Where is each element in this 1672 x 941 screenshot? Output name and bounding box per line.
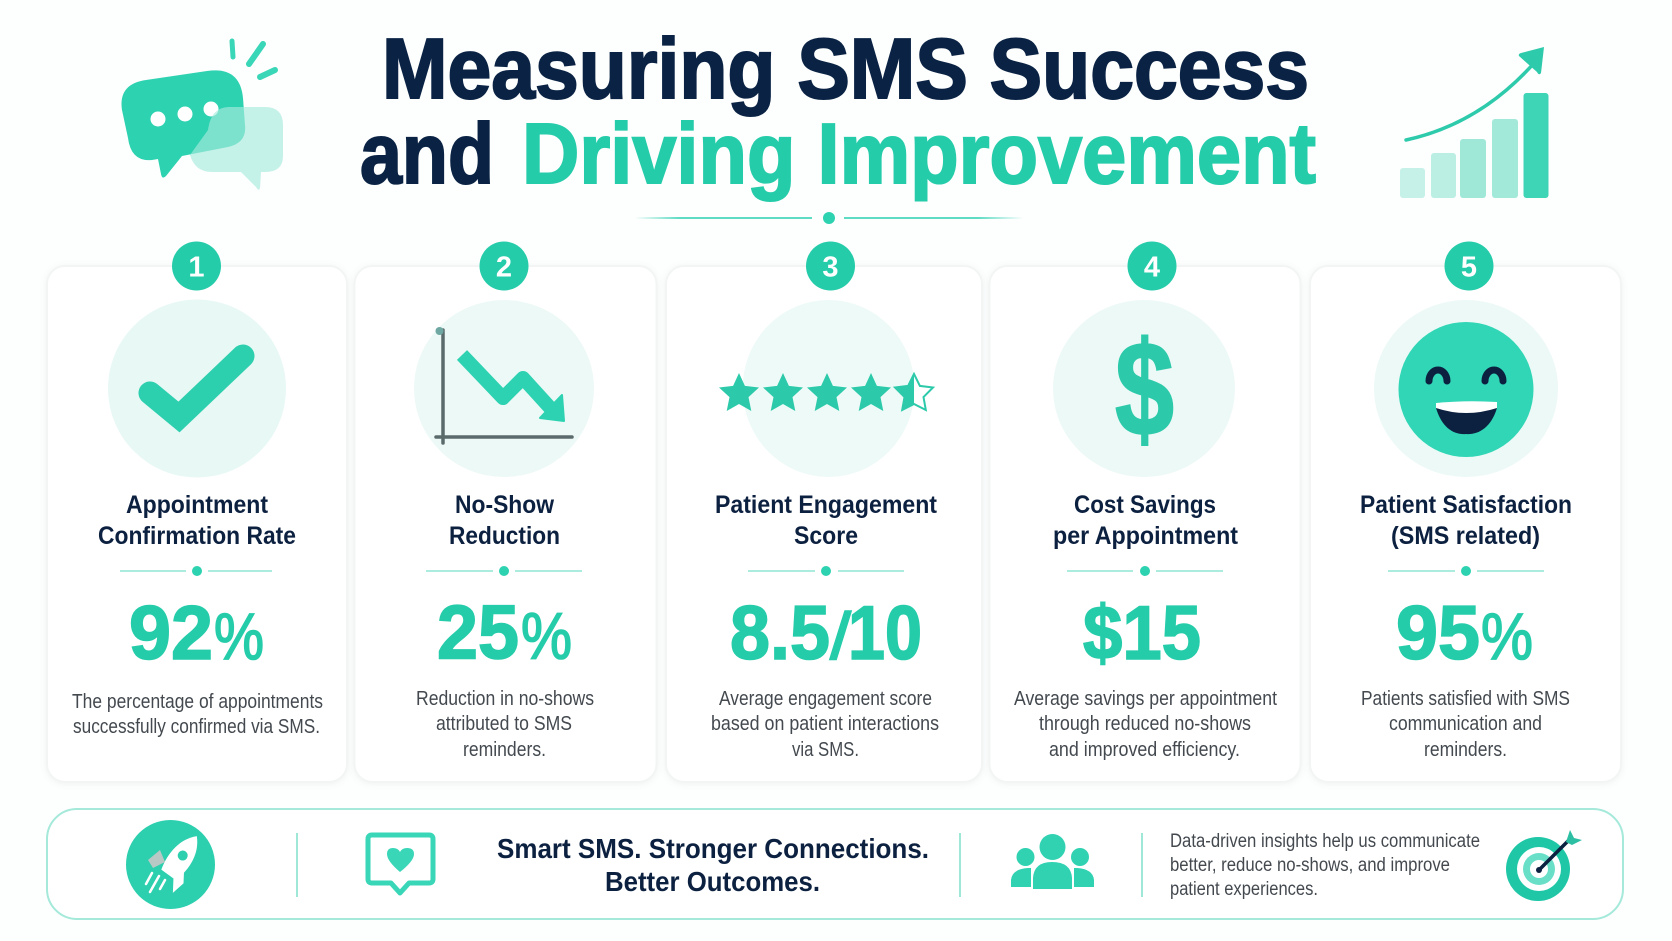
heading: per Appointment <box>1053 522 1239 550</box>
panel: footer banner <box>47 809 1623 919</box>
metric: % <box>521 598 572 672</box>
number badge 2 <box>480 242 528 290</box>
icon: dollar sign <box>1053 300 1235 477</box>
description: Patients satisfied with SMS <box>1361 688 1570 710</box>
icon: declining chart <box>414 300 594 477</box>
metric: / <box>830 599 852 673</box>
description: Average savings per appointment <box>1014 688 1277 710</box>
icon: rocket <box>126 820 215 909</box>
description <box>416 688 594 761</box>
heading <box>1360 491 1572 550</box>
heading: Confirmation Rate <box>98 522 296 550</box>
tagline: Smart SMS. Stronger Connections. <box>497 833 929 864</box>
number badge 3 <box>806 242 855 290</box>
number badge 5 <box>1444 242 1494 290</box>
heading: Reduction <box>449 522 560 550</box>
metric <box>730 591 922 676</box>
heading: Cost Savings <box>1074 491 1216 519</box>
description: Average engagement score <box>719 688 932 710</box>
icon: heart message <box>368 835 433 893</box>
panel: patient engagement score <box>666 242 982 782</box>
title <box>360 22 1316 202</box>
tagline <box>497 833 929 897</box>
icon: chat bubbles <box>122 41 283 190</box>
metric: % <box>214 599 264 673</box>
number badge 4 <box>1128 242 1176 290</box>
description <box>711 688 939 761</box>
metric <box>437 590 572 676</box>
number badge 2: 2 <box>496 252 512 284</box>
heading <box>449 491 560 550</box>
description: The percentage of appointments <box>72 691 323 713</box>
number badge 1: 1 <box>188 252 205 284</box>
insight text: better, reduce no-shows, and improve <box>1170 855 1450 876</box>
title divider <box>635 212 1023 224</box>
metric <box>1396 591 1533 676</box>
insight text <box>1170 831 1480 900</box>
icon: check mark <box>108 300 286 478</box>
description: based on patient interactions <box>711 713 939 735</box>
description: through reduced no-shows <box>1039 713 1251 735</box>
description <box>72 691 323 738</box>
title: Measuring SMS Success <box>382 22 1309 117</box>
metric: 10 <box>848 591 922 676</box>
heading: No-Show <box>455 491 554 519</box>
heading <box>98 491 296 550</box>
icon: smiling face <box>1374 300 1558 477</box>
metric <box>129 591 264 676</box>
heading: Score <box>794 522 858 550</box>
icon: target with arrow <box>1506 830 1582 901</box>
description: attributed to SMS <box>436 713 572 735</box>
description: successfully confirmed via SMS. <box>73 716 320 738</box>
icon: people group <box>1011 834 1094 889</box>
icon: rating stars <box>719 300 933 477</box>
panel: patient satisfaction <box>1310 242 1621 782</box>
heading: Patient Engagement <box>715 491 938 519</box>
description <box>1361 688 1570 761</box>
icon: rising bar chart with arrow <box>1400 47 1548 198</box>
insight text: patient experiences. <box>1170 879 1318 900</box>
panel: cost savings per appointment <box>990 242 1300 782</box>
description: Reduction in no-shows <box>416 688 594 710</box>
description: via SMS. <box>792 739 859 761</box>
number badge 4: 4 <box>1144 252 1160 284</box>
icon: dollar sign: $ <box>1115 315 1174 464</box>
description <box>1014 688 1277 761</box>
metric: 25 <box>437 590 519 676</box>
metric: 92 <box>129 591 213 676</box>
panel: no-show reduction <box>354 242 656 782</box>
description: reminders. <box>1424 739 1507 761</box>
heading: (SMS related) <box>1391 522 1540 550</box>
insight text: Data-driven insights help us communicate <box>1170 831 1480 852</box>
heading <box>1053 491 1239 550</box>
metric: 8.5 <box>730 591 830 676</box>
heading: Appointment <box>126 491 269 519</box>
tagline: Better Outcomes. <box>605 866 820 897</box>
metric: 95 <box>1396 591 1480 676</box>
number badge 5: 5 <box>1461 252 1477 284</box>
description: communication and <box>1389 713 1542 735</box>
title: and <box>360 107 494 202</box>
panel: appointment confirmation rate <box>47 242 347 782</box>
heading <box>715 491 938 550</box>
number badge 1 <box>172 242 221 290</box>
description: and improved efficiency. <box>1049 739 1240 761</box>
title: Driving Improvement <box>522 107 1316 202</box>
metric: $15 <box>1083 591 1201 676</box>
description: reminders. <box>463 739 546 761</box>
number badge 3: 3 <box>822 252 839 284</box>
heading: Patient Satisfaction <box>1360 491 1572 519</box>
metric: % <box>1481 599 1533 673</box>
